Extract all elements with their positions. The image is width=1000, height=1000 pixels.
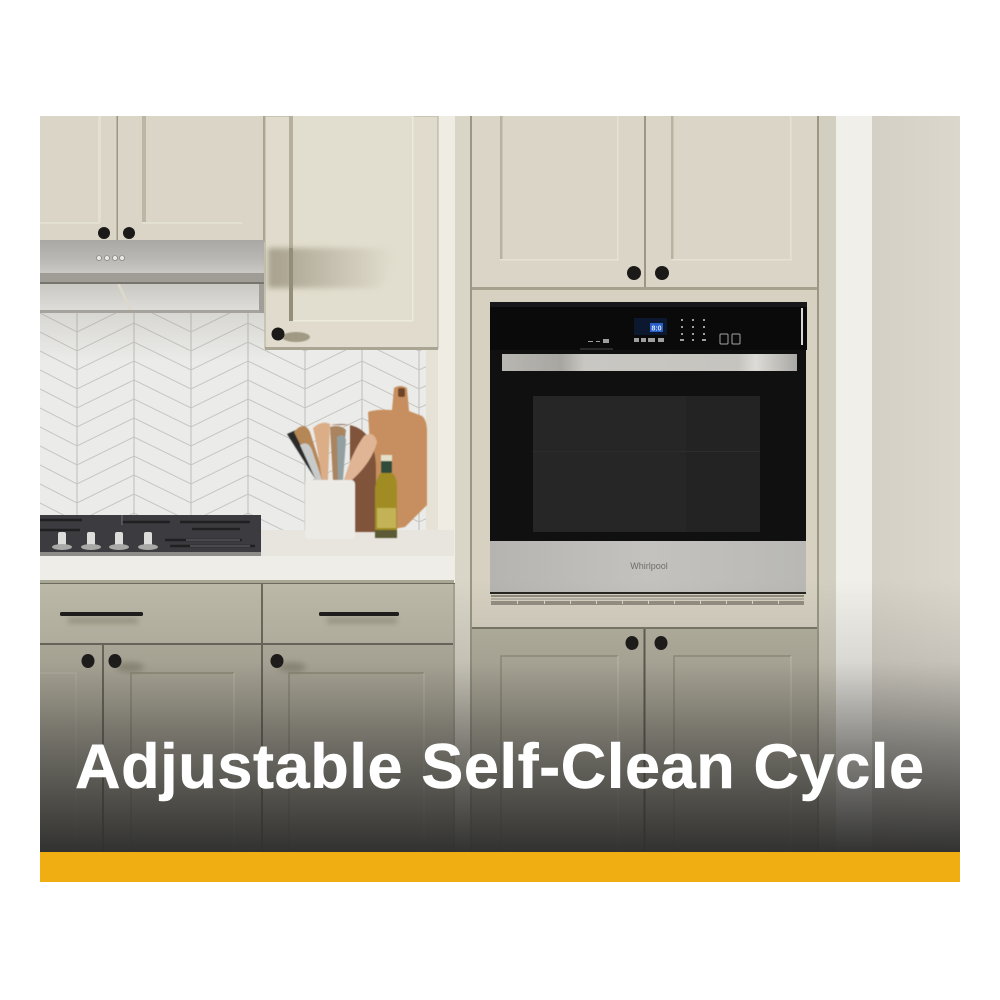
oven door xyxy=(490,350,806,541)
lower cabinets xyxy=(40,583,455,839)
drawer pulls xyxy=(60,612,143,616)
cutting board xyxy=(368,386,427,532)
upper left cabinets xyxy=(98,116,264,242)
oven window xyxy=(533,396,686,532)
door handle xyxy=(502,354,797,371)
dark gradient overlay xyxy=(40,608,960,852)
dark round board xyxy=(330,424,376,532)
kitchen photo xyxy=(40,116,960,852)
keypad xyxy=(588,319,706,343)
inset door panels xyxy=(40,672,424,799)
wall and side columns xyxy=(40,116,960,852)
title: Adjustable Self-Clean Cycle xyxy=(75,732,924,802)
control panel xyxy=(490,307,807,350)
wall oven xyxy=(490,302,807,605)
lower steel panel xyxy=(490,541,806,592)
tall cabinet right column xyxy=(472,116,817,852)
lower door knobs xyxy=(626,636,638,650)
upper knobs xyxy=(627,266,641,280)
lower knobs xyxy=(82,654,94,668)
vent rail xyxy=(490,592,806,594)
wall cabinet above counter xyxy=(265,116,438,350)
countertop xyxy=(40,530,454,583)
oven surround xyxy=(472,290,817,628)
utensils, cutting boards and oil bottle xyxy=(287,386,427,539)
lower doors xyxy=(472,629,817,812)
cooktop knobs xyxy=(58,532,152,544)
chevron tile backsplash xyxy=(40,312,426,530)
hood buttons xyxy=(96,256,124,260)
cabinet knobs xyxy=(98,227,110,239)
gas cooktop xyxy=(40,515,261,556)
utensils xyxy=(286,430,316,480)
marble crock xyxy=(305,480,355,539)
wall oven: 8:0 xyxy=(651,326,662,332)
olive oil bottle xyxy=(380,460,392,474)
oven display xyxy=(634,318,667,335)
range hood xyxy=(40,240,264,313)
cabinet knob xyxy=(282,332,310,342)
yellow accent bar xyxy=(40,852,960,882)
brand wordmark: Whirlpool xyxy=(630,561,668,571)
infographic canvas xyxy=(40,116,960,882)
pull shadows xyxy=(67,616,398,674)
